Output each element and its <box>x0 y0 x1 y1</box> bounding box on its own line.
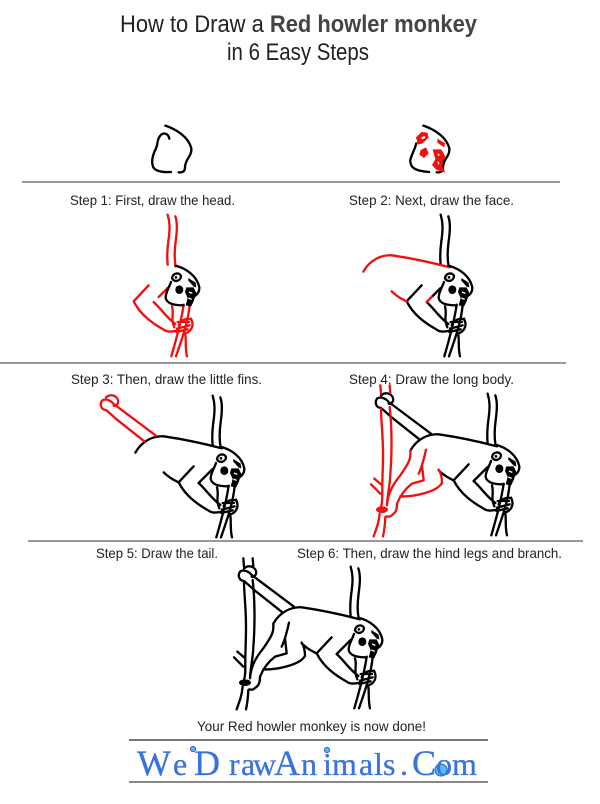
logo text: WeD rawAnimals.Com <box>137 743 477 783</box>
caption: step 1: Step 1: First, draw the head. <box>70 192 235 208</box>
logo band <box>129 739 488 783</box>
caption: step 3: Step 3: Then, draw the little fins. <box>71 371 262 387</box>
title: in 6 Easy Steps <box>227 39 369 66</box>
caption: step 5: Step 5: Draw the tail. <box>96 545 218 561</box>
logo decorations <box>190 746 447 776</box>
closing text: Your Red howler monkey is now done! <box>197 718 426 734</box>
title: How to Draw a Red howler monkey <box>120 11 478 38</box>
finished monkey <box>234 558 382 709</box>
step 2 drawing: head with red face <box>410 126 449 173</box>
title <box>120 11 478 66</box>
step 6 monkey: red body and legs <box>371 385 519 536</box>
step 1 drawing: head <box>152 126 191 172</box>
step 4 monkey: red back added <box>363 215 472 356</box>
divider 3 <box>28 540 583 542</box>
step 5 monkey: red upper arm <box>101 395 244 537</box>
caption: step 2: Step 2: Next, draw the face. <box>349 192 514 208</box>
caption: step 4: Step 4: Draw the long body. <box>349 371 514 387</box>
caption: step 6: Step 6: Then, draw the hind legs and branch. <box>297 545 562 561</box>
divider 2 <box>0 362 566 364</box>
divider 1 <box>22 181 560 183</box>
step 3 monkey: vine, limbs in red <box>134 215 199 356</box>
red face details <box>416 132 445 173</box>
